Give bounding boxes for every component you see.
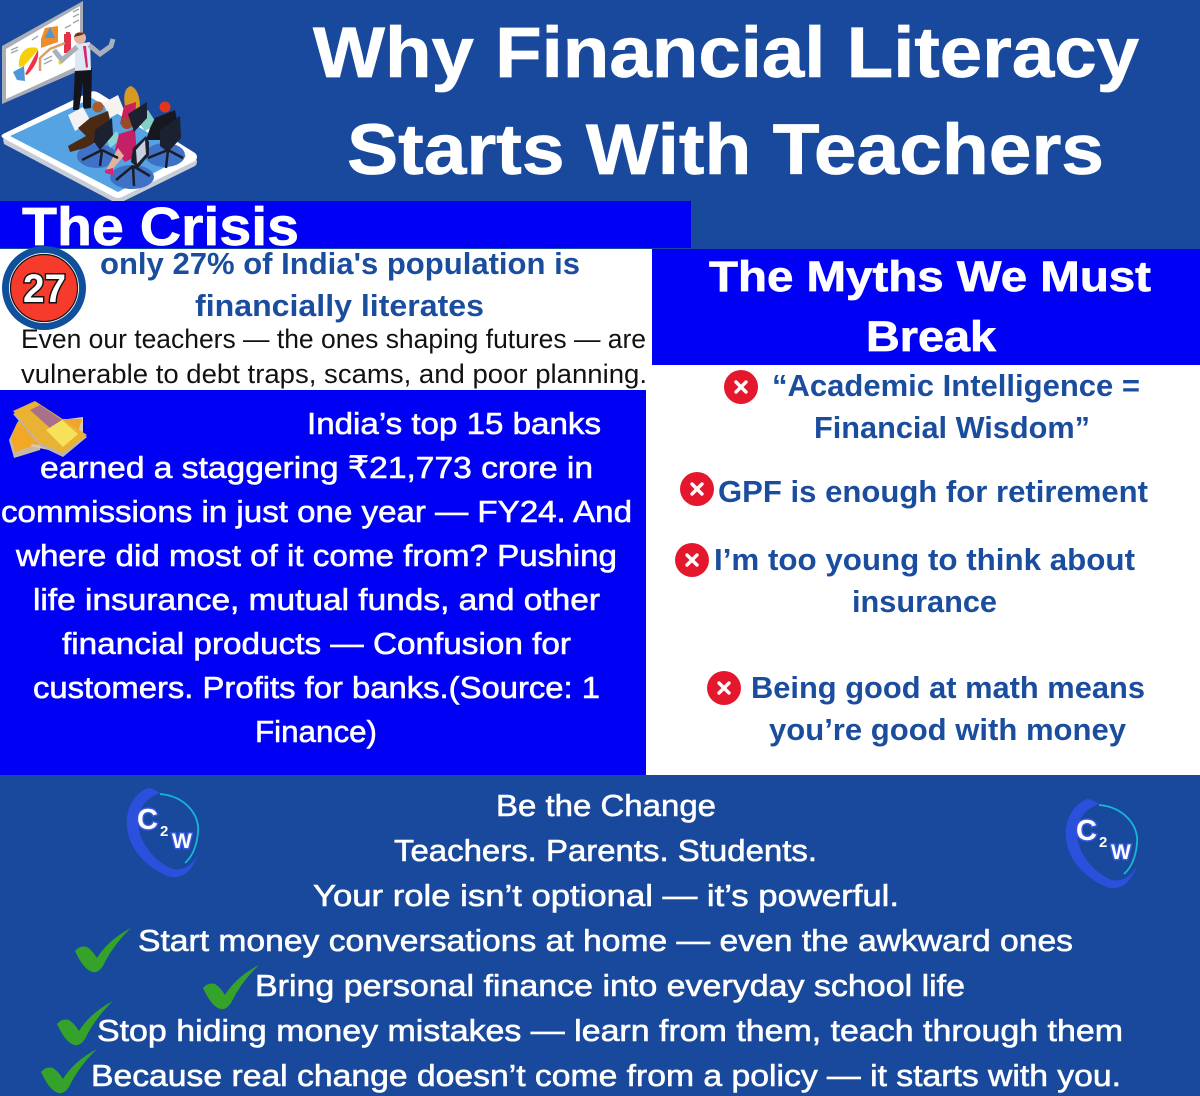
icon: 27 badge [2, 246, 86, 330]
seated team [68, 86, 183, 186]
crisis heading band: The Crisis [22, 197, 299, 257]
logo: C2W right: C [1076, 815, 1097, 847]
panel: bank commissions: India’s top 15 banks [307, 406, 601, 441]
teachers vulnerability text: Even our teachers — the ones shaping futures — are [21, 324, 646, 354]
icon: 27 badge: 27 [23, 267, 66, 311]
crisis heading band [0, 197, 691, 257]
icon: rupee bundles [9, 401, 87, 458]
call to action text: Start money conversations at home — even the awkward ones [138, 923, 1073, 958]
call to action text: Because real change doesn’t come from a policy — it starts with you. [91, 1058, 1121, 1093]
icon: green check 4 [41, 1049, 97, 1093]
panel: bank commissions: earned a staggering ₹21,773 crore in [40, 450, 593, 485]
call to action text: Be the Change [496, 788, 716, 823]
panel: bank commissions: where did most of it come from? Pushing [15, 538, 617, 573]
panel: bank commissions: life insurance, mutual funds, and other [33, 582, 600, 617]
teacher [54, 32, 113, 110]
teachers vulnerability text: vulnerable to debt traps, scams, and poor planning. [21, 359, 647, 389]
panel: bank commissions: commissions in just one year — FY24. And [1, 494, 632, 529]
headline statistic: financially literates [195, 288, 484, 323]
call to action text: Teachers. Parents. Students. [394, 833, 817, 868]
logo: C2W left [127, 788, 198, 877]
myth 1: “Academic Intelligence = [772, 368, 1140, 403]
headline statistic: only 27% of India's population is [100, 246, 580, 281]
call to action text [91, 788, 1123, 1093]
myth 4: you’re good with money [769, 712, 1127, 747]
icon: green check 1 [75, 928, 131, 972]
panel: bank commissions: financial products — Confusion for [62, 626, 571, 661]
logo: C2W left: 2 [160, 823, 168, 840]
panel: bank commissions [0, 390, 646, 775]
icon: green check 2 [203, 965, 259, 1009]
logo: C2W left: C [137, 804, 158, 836]
logo: C2W left: W [172, 830, 192, 853]
panel: bank commissions: customers. Profits for banks.(Source: 1 [33, 670, 600, 705]
myth 3: insurance [852, 584, 997, 619]
panel: bank commissions: Finance) [255, 714, 377, 749]
panel: myths [646, 365, 1200, 775]
myth 2: GPF is enough for retirement [718, 474, 1148, 509]
teachers vulnerability text [21, 324, 647, 389]
call to action text: Bring personal finance into everyday school life [255, 968, 965, 1003]
presentation board [2, 1, 83, 104]
myths heading band: The Myths We Must [709, 253, 1151, 301]
call to action text: Stop hiding money mistakes — learn from them, teach through them [97, 1013, 1123, 1048]
myth 1: Financial Wisdom” [814, 410, 1090, 445]
tablet [2, 91, 197, 203]
headline statistic [100, 246, 580, 323]
title: Starts With Teachers [347, 111, 1104, 190]
logo: C2W right [1066, 799, 1137, 888]
myths heading band: Break [866, 313, 996, 361]
logo: C2W right: W [1111, 841, 1131, 864]
illustration: teacher presenting to team on a tablet [2, 1, 197, 203]
call to action text: Your role isn’t optional — it’s powerful. [313, 878, 899, 913]
myth 1 [724, 368, 1140, 445]
myth 4 [707, 670, 1145, 747]
panel: crisis statistic [0, 246, 652, 390]
myth 3 [675, 542, 1135, 619]
myths heading band [652, 249, 1200, 365]
icon: green check 3 [57, 1001, 113, 1045]
myth 3: I’m too young to think about [714, 542, 1135, 577]
logo: C2W right: 2 [1099, 834, 1107, 851]
myth 4: Being good at math means [751, 670, 1145, 705]
title [313, 14, 1140, 190]
title: Why Financial Literacy [313, 14, 1140, 93]
